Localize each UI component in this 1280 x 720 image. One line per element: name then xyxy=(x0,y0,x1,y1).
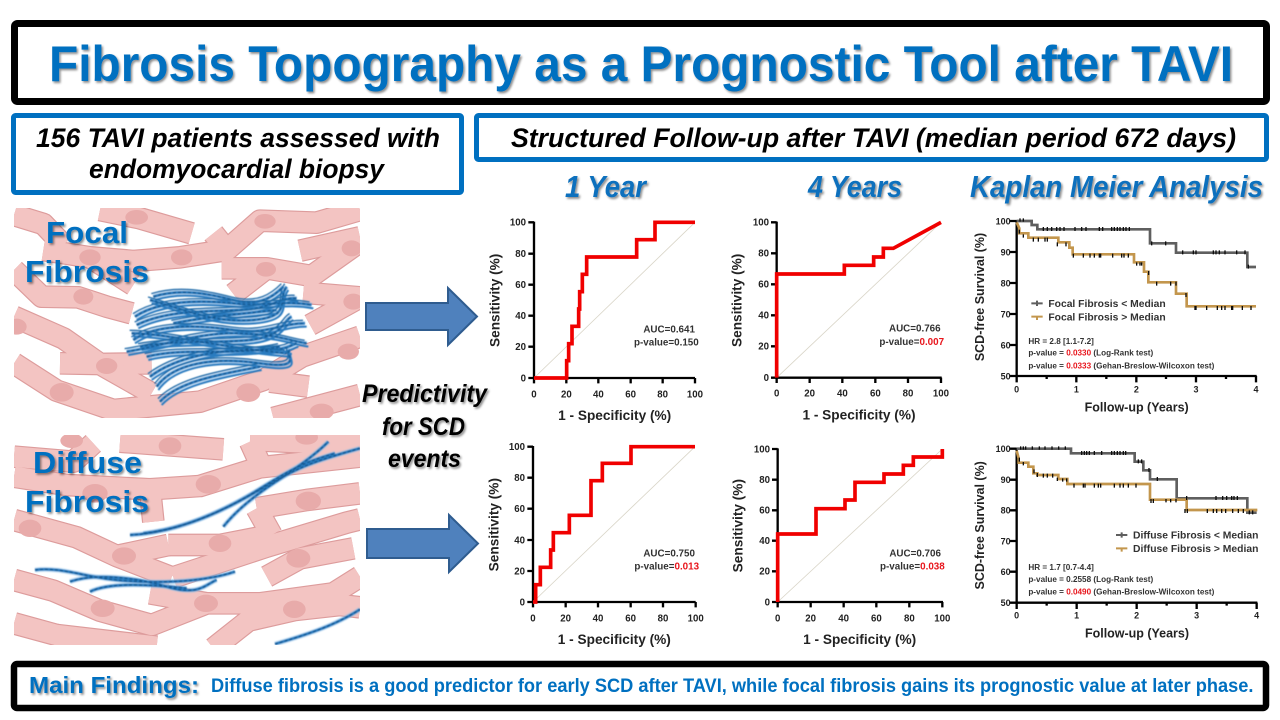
ROC chart: focal fibrosis 1 year: 60 xyxy=(625,389,636,400)
Kaplan Meier chart: focal fibrosis: 100 xyxy=(996,216,1011,226)
ROC chart: focal fibrosis 1 year: 80 xyxy=(515,249,526,260)
ROC chart: diffuse fibrosis 1 year: 100 xyxy=(509,442,525,453)
legend: Diffuse Fibrosis < Median xyxy=(1133,531,1258,542)
ROC chart: focal fibrosis 1 year: AUC=0.641 xyxy=(643,324,695,335)
legend xyxy=(1031,299,1166,323)
ROC chart: focal fibrosis 4 years: 0 xyxy=(774,389,779,400)
arrow: focal to charts xyxy=(366,288,477,345)
label: Diffuse Fibrosis: Diffuse xyxy=(33,445,142,480)
curve: above median xyxy=(1017,222,1256,306)
label: Diffuse Fibrosis: Fibrosis xyxy=(25,484,149,519)
ROC chart: diffuse fibrosis 1 year: p-value=0.013 xyxy=(634,561,700,572)
ROC chart: focal fibrosis 1 year: 1 - Specificity (%) xyxy=(558,408,671,423)
ROC chart: focal fibrosis 1 year: 100 xyxy=(687,389,703,400)
ROC chart: focal fibrosis 1 year: 0 xyxy=(521,373,526,384)
ROC chart: diffuse fibrosis 4 years: 80 xyxy=(904,614,915,625)
ROC chart: focal fibrosis 1 year: 0 xyxy=(531,389,537,400)
curve: below median xyxy=(1017,449,1257,513)
cohort text: endomyocardial biopsy xyxy=(89,154,386,184)
ROC chart: diffuse fibrosis 4 years: 100 xyxy=(754,444,770,455)
main findings text: Diffuse fibrosis is a good predictor for early SCD after TAVI, while focal fibrosis gains its prognostic value at later phase. xyxy=(211,676,1254,697)
ROC chart: focal fibrosis 4 years: 1 - Specificity (%) xyxy=(802,407,916,422)
ROC chart: diffuse fibrosis 4 years: p-value=0.038 xyxy=(880,561,945,572)
follow-up text: Structured Follow-up after TAVI (median period 672 days) xyxy=(511,123,1236,153)
panel: follow-up header xyxy=(476,116,1266,160)
label: Predictivity for SCD events: for SCD xyxy=(382,413,465,441)
ROC chart: diffuse fibrosis 4 years: 80 xyxy=(759,475,770,486)
Kaplan Meier chart: focal fibrosis: 90 xyxy=(1001,247,1011,257)
ROC chart: focal fibrosis 4 years: p-value=0.007 xyxy=(879,337,945,348)
label: Focal Fibrosis: Focal xyxy=(46,215,128,250)
Kaplan Meier chart: focal fibrosis: 50 xyxy=(1001,371,1011,381)
Kaplan Meier chart: diffuse fibrosis: 4 xyxy=(1254,611,1259,621)
panel: focal fibrosis illustration xyxy=(7,210,363,420)
statistics: p-value = 0.0490 (Gehan-Breslow-Wilcoxon test) xyxy=(1028,588,1215,597)
Kaplan Meier chart: diffuse fibrosis: 2 xyxy=(1134,611,1139,621)
Kaplan Meier chart: focal fibrosis: 80 xyxy=(1001,278,1011,288)
ROC chart: diffuse fibrosis 1 year: Sensitivity (%) xyxy=(486,478,501,571)
ROC chart: diffuse fibrosis 4 years: 20 xyxy=(805,614,816,625)
curve: above median xyxy=(1017,451,1257,510)
legend xyxy=(1116,531,1258,555)
ROC chart: focal fibrosis 4 years: 40 xyxy=(837,389,848,400)
ROC chart: diffuse fibrosis 4 years xyxy=(731,444,950,647)
Kaplan Meier chart: focal fibrosis: 2 xyxy=(1134,385,1139,395)
Kaplan Meier chart: diffuse fibrosis xyxy=(973,444,1259,641)
heading: 4 Years: 4 Years xyxy=(807,169,902,204)
ROC chart: diffuse fibrosis 1 year: 1 - Specificity (%) xyxy=(558,632,671,647)
ROC chart: diffuse fibrosis 1 year: 40 xyxy=(514,535,525,546)
ROC chart: focal fibrosis 4 years: 60 xyxy=(758,280,769,291)
ROC chart: diffuse fibrosis 1 year: 80 xyxy=(514,473,525,484)
ROC chart: diffuse fibrosis 1 year: 40 xyxy=(593,614,603,625)
ROC chart: diffuse fibrosis 1 year: 100 xyxy=(688,614,704,625)
ROC chart: focal fibrosis 1 year: p-value=0.150 xyxy=(634,338,699,349)
Kaplan Meier chart: diffuse fibrosis: Follow-up (Years) xyxy=(1085,627,1189,641)
ROC chart: diffuse fibrosis 4 years: 100 xyxy=(934,614,950,625)
ROC chart: focal fibrosis 1 year: 80 xyxy=(657,389,668,400)
ROC chart: focal fibrosis 4 years: 20 xyxy=(758,342,769,353)
Kaplan Meier chart: diffuse fibrosis: 0 xyxy=(1014,611,1019,621)
Kaplan Meier chart: diffuse fibrosis: 90 xyxy=(1001,475,1011,485)
ROC chart: focal fibrosis 4 years: Sensitivity (%) xyxy=(730,254,745,347)
label: Predictivity for SCD events: Predictivity xyxy=(362,380,488,408)
ROC chart: focal fibrosis 4 years: 20 xyxy=(804,389,815,400)
ROC chart: focal fibrosis 4 years: 80 xyxy=(903,389,913,400)
statistics: p-value = 0.0333 (Gehan-Breslow-Wilcoxon test) xyxy=(1028,361,1215,370)
cohort text: 156 TAVI patients assessed with xyxy=(36,123,440,153)
Kaplan Meier chart: focal fibrosis xyxy=(973,216,1258,415)
statistics xyxy=(1028,337,1215,370)
title: Fibrosis Topography as a Prognostic Tool after TAVI xyxy=(49,36,1233,92)
curve: below median xyxy=(1017,221,1256,267)
label: Predictivity for SCD events: events xyxy=(388,445,461,473)
ROC chart: focal fibrosis 1 year xyxy=(487,218,703,423)
ROC chart: focal fibrosis 4 years: 40 xyxy=(758,311,769,322)
ROC chart: diffuse fibrosis 4 years: 60 xyxy=(871,614,882,625)
Kaplan Meier chart: focal fibrosis: 0 xyxy=(1014,385,1019,395)
panel: main findings xyxy=(14,664,1266,708)
panel: cohort xyxy=(14,116,462,192)
Kaplan Meier chart: focal fibrosis: 70 xyxy=(1001,309,1011,319)
Kaplan Meier chart: diffuse fibrosis: 50 xyxy=(1001,598,1011,608)
ROC chart: diffuse fibrosis 1 year: 80 xyxy=(658,614,668,625)
Kaplan Meier chart: diffuse fibrosis: 80 xyxy=(1001,506,1011,516)
ROC chart: focal fibrosis 4 years: 60 xyxy=(870,389,881,400)
ROC chart: focal fibrosis 4 years: 0 xyxy=(764,373,769,384)
Kaplan Meier chart: diffuse fibrosis: 3 xyxy=(1194,611,1199,621)
heading: 1 Year: 1 Year xyxy=(565,169,648,204)
ROC chart: diffuse fibrosis 4 years: Sensitivity (%) xyxy=(731,479,746,572)
legend: Diffuse Fibrosis > Median xyxy=(1133,544,1258,555)
ROC chart: focal fibrosis 4 years xyxy=(730,218,949,422)
ROC chart: diffuse fibrosis 1 year xyxy=(486,442,704,647)
Kaplan Meier chart: focal fibrosis: 60 xyxy=(1001,340,1011,350)
ROC chart: diffuse fibrosis 4 years: 40 xyxy=(759,536,770,547)
statistics xyxy=(1028,563,1215,597)
panel: diffuse fibrosis illustration xyxy=(14,430,360,648)
ROC chart: focal fibrosis 4 years: 100 xyxy=(933,389,949,400)
ROC chart: focal fibrosis 4 years: 100 xyxy=(753,218,769,229)
Kaplan Meier chart: diffuse fibrosis: 1 xyxy=(1074,611,1079,621)
Kaplan Meier chart: focal fibrosis: 4 xyxy=(1253,385,1258,395)
ROC chart: focal fibrosis 1 year: Sensitivity (%) xyxy=(487,254,502,347)
ROC chart: diffuse fibrosis 1 year: 20 xyxy=(514,566,525,577)
ROC chart: diffuse fibrosis 4 years: 60 xyxy=(759,506,770,517)
ROC chart: diffuse fibrosis 4 years: 40 xyxy=(838,614,849,625)
Kaplan Meier chart: focal fibrosis: 1 xyxy=(1074,385,1079,395)
ROC chart: focal fibrosis 1 year: 60 xyxy=(515,280,526,291)
Kaplan Meier chart: focal fibrosis: 3 xyxy=(1193,385,1198,395)
ROC chart: diffuse fibrosis 4 years: 1 - Specificity (%) xyxy=(803,632,916,647)
ROC chart: diffuse fibrosis 1 year: 0 xyxy=(520,597,525,608)
ROC chart: diffuse fibrosis 1 year: 60 xyxy=(625,614,636,625)
ROC chart: diffuse fibrosis 1 year: AUC=0.750 xyxy=(643,548,695,559)
ROC chart: diffuse fibrosis 4 years: AUC=0.706 xyxy=(889,549,941,560)
ROC chart: focal fibrosis 1 year: 20 xyxy=(515,342,526,353)
statistics: HR = 2.8 [1.1-7.2] xyxy=(1028,337,1094,346)
ROC chart: focal fibrosis 4 years: 80 xyxy=(758,249,769,260)
title box xyxy=(14,24,1266,102)
ROC chart: focal fibrosis 1 year: 20 xyxy=(561,389,572,400)
ROC chart: diffuse fibrosis 1 year: 20 xyxy=(560,614,571,625)
arrow: diffuse to charts xyxy=(367,515,478,572)
Kaplan Meier chart: diffuse fibrosis: 100 xyxy=(996,444,1011,454)
ROC chart: diffuse fibrosis 4 years: 20 xyxy=(759,567,770,578)
main findings heading: Main Findings: xyxy=(29,672,199,698)
label: Focal Fibrosis: Fibrosis xyxy=(25,254,149,289)
statistics: p-value = 0.2558 (Log-Rank test) xyxy=(1028,575,1153,584)
Kaplan Meier chart: focal fibrosis: SCD-free Survival (%) xyxy=(973,233,987,361)
ROC chart: focal fibrosis 1 year: 100 xyxy=(510,218,526,229)
ROC chart: focal fibrosis 1 year: 40 xyxy=(515,311,526,322)
ROC chart: diffuse fibrosis 1 year: 60 xyxy=(514,504,525,515)
Kaplan Meier chart: diffuse fibrosis: 60 xyxy=(1001,567,1011,577)
statistics: HR = 1.7 [0.7-4.4] xyxy=(1028,563,1094,572)
ROC chart: diffuse fibrosis 1 year: 0 xyxy=(530,614,536,625)
legend: Focal Fibrosis > Median xyxy=(1048,312,1166,323)
Kaplan Meier chart: focal fibrosis: Follow-up (Years) xyxy=(1085,401,1189,415)
legend: Focal Fibrosis < Median xyxy=(1048,299,1166,310)
Kaplan Meier chart: diffuse fibrosis: SCD-free Survival (%) xyxy=(973,461,987,590)
ROC chart: focal fibrosis 4 years: AUC=0.766 xyxy=(889,324,941,335)
ROC chart: focal fibrosis 1 year: 40 xyxy=(593,389,604,400)
Kaplan Meier chart: diffuse fibrosis: 70 xyxy=(1001,536,1011,546)
ROC chart: diffuse fibrosis 4 years: 0 xyxy=(775,614,780,625)
statistics: p-value = 0.0330 (Log-Rank test) xyxy=(1028,348,1154,357)
ROC chart: diffuse fibrosis 4 years: 0 xyxy=(765,597,770,608)
